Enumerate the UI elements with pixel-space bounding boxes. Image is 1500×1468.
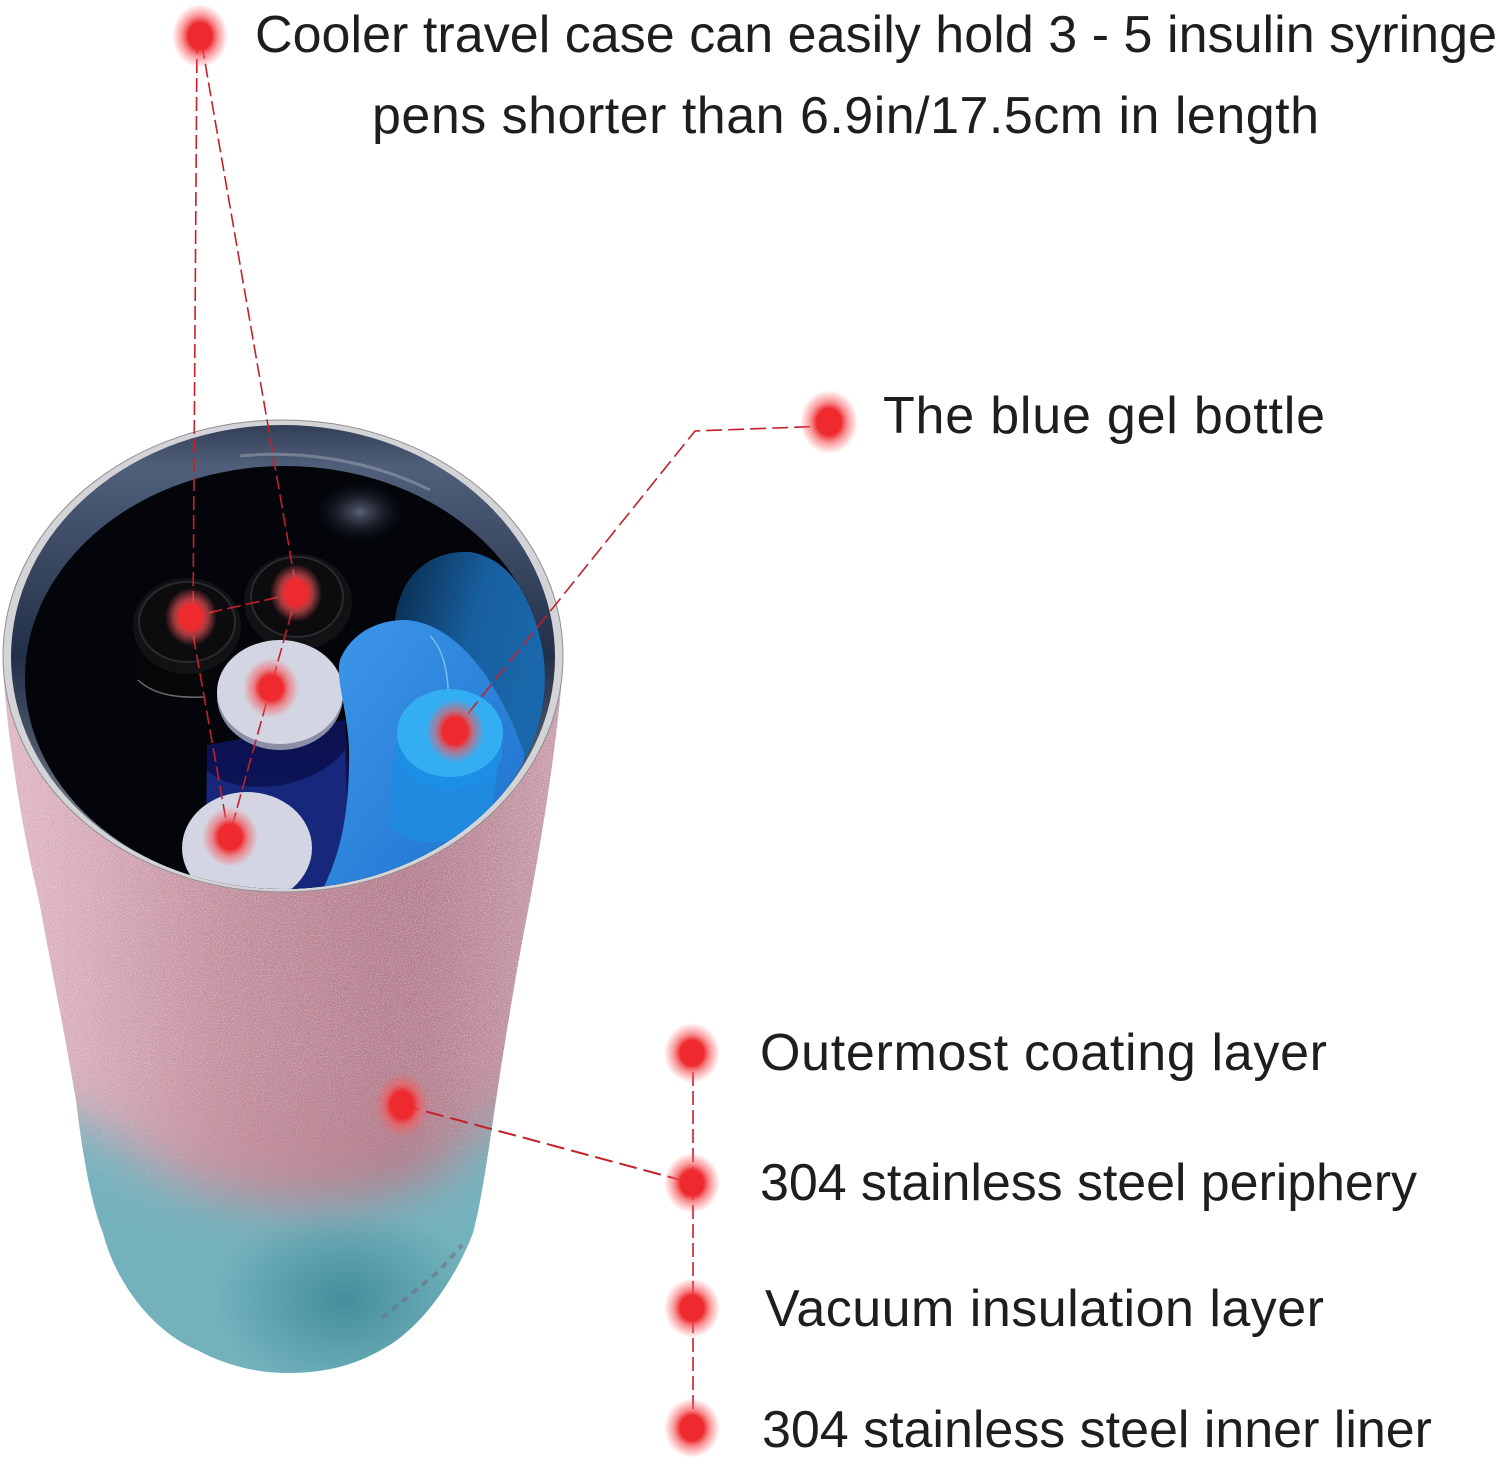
dot: outermost coating xyxy=(664,1023,720,1083)
label: vacuum insulation layer: Vacuum insulation layer xyxy=(765,1280,1324,1338)
dot: white cap one xyxy=(243,658,299,718)
dot: tumbler body xyxy=(375,1073,429,1137)
dot: inner liner xyxy=(664,1398,720,1458)
heading: syringe capacity: pens shorter than 6.9in/17.5cm in length xyxy=(372,87,1319,145)
inner wall xyxy=(11,425,555,889)
dot: pen cap one xyxy=(165,588,217,646)
silver rim xyxy=(3,420,563,892)
tumbler body with pink to teal gradient xyxy=(4,677,562,1373)
left black pen xyxy=(133,578,241,698)
label: blue gel bottle: The blue gel bottle xyxy=(883,387,1325,445)
dot: steel periphery xyxy=(664,1153,720,1213)
dot: white cap two xyxy=(202,807,258,867)
faint logo on body xyxy=(382,1245,462,1318)
dot: pen cap two xyxy=(270,564,322,622)
navy pen body xyxy=(205,720,350,895)
marker dots xyxy=(165,4,858,1458)
label: stainless steel periphery: 304 stainless steel periphery xyxy=(760,1154,1417,1212)
right black pen xyxy=(244,554,352,650)
heading: syringe capacity xyxy=(255,6,1497,145)
tumbler illustration xyxy=(2,420,564,1373)
dot: gel bottle callout xyxy=(800,390,858,454)
leader line to gel bottle xyxy=(454,426,829,731)
blue gel bottle xyxy=(320,620,524,895)
dot: gel bottle cap xyxy=(426,699,484,763)
dot: syringe callout xyxy=(172,4,228,68)
leader line to tumbler layers xyxy=(402,1105,692,1183)
label: outermost coating layer: Outermost coating layer xyxy=(760,1024,1327,1082)
wall texture streak xyxy=(240,454,430,490)
label: stainless steel inner liner: 304 stainless steel inner liner xyxy=(762,1401,1432,1459)
leader lines to syringe pens xyxy=(190,40,297,837)
white cap pen lower xyxy=(182,792,312,889)
heading: syringe capacity: Cooler travel case can easily hold 3 - 5 insulin syringe xyxy=(255,6,1497,64)
dot: vacuum layer xyxy=(664,1278,720,1338)
back blue reflection xyxy=(395,552,548,780)
white cap pen upper xyxy=(217,640,343,750)
callout lines xyxy=(190,40,829,1428)
dark interior with contents xyxy=(25,452,545,889)
vertical line joining layers xyxy=(692,1053,694,1428)
